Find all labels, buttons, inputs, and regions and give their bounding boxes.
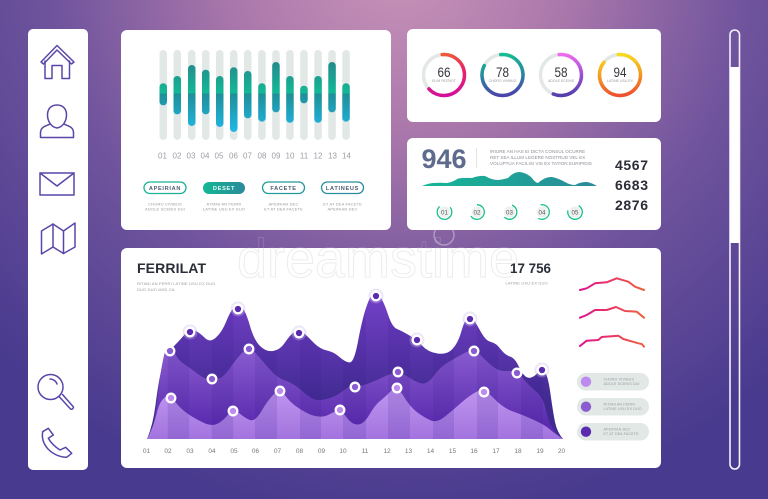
bar labels [158, 152, 351, 160]
x axis labels: 18 [514, 448, 522, 455]
filter: deset: DESET [213, 186, 235, 192]
column stripes [168, 308, 543, 439]
step 02: 02 [474, 209, 481, 216]
watermark: dreamstime [237, 227, 519, 289]
markers: lower series [167, 384, 488, 415]
bar labels: 11 [300, 152, 309, 160]
x axis labels: 17 [492, 448, 500, 455]
x axis labels: 07 [274, 448, 281, 455]
markers: middle series [166, 345, 521, 391]
description text: VOLUPTUA FACILISI VIS EX TATION EURIPIDIS [490, 161, 592, 166]
layered area chart [147, 285, 563, 440]
filter: deset: RITANI AN PERRI [207, 202, 241, 206]
x axis labels: 10 [339, 448, 347, 455]
panel: progress rings [407, 29, 661, 122]
legend item 1 [577, 373, 649, 390]
step 01 [434, 202, 455, 222]
sparkline 3 [580, 336, 644, 347]
description text: IRIURE AN HAS EI DICTA CONSUL OCURRE [490, 149, 585, 154]
filter: facete: ET AT DEA FACETE [264, 206, 303, 212]
legend item 1: CHORO VIVIBUS [604, 378, 634, 382]
panel: ferrilat chart [121, 227, 661, 468]
total caption: LATINE USU EX DUO [506, 280, 548, 286]
subheading: DUO DUO MIGI CA [137, 287, 175, 292]
watermark [238, 237, 517, 278]
icon: mail [40, 173, 74, 195]
area: middle layer [150, 346, 563, 439]
ring 66: ELIM PATRIOT [432, 79, 457, 83]
x axis labels: 19 [536, 448, 544, 455]
x axis labels: 16 [470, 448, 478, 455]
filter: apeirian: CHORO VIVIBUS [148, 202, 182, 206]
panel: summary [407, 138, 661, 230]
bar labels: 01 [158, 152, 167, 160]
step 04: 04 [539, 209, 546, 216]
area: lower layer [147, 389, 563, 439]
filter: latineus: APEIRIAN DEC [327, 206, 358, 212]
legend item 2: RITANI AN PERRI [604, 402, 635, 406]
step 04 [534, 204, 550, 220]
heading: FERRILAT [137, 260, 206, 276]
x axis labels: 14 [427, 448, 434, 455]
x axis labels: 13 [405, 448, 412, 455]
ring 78: 78 [496, 64, 509, 80]
x axis labels [143, 448, 565, 455]
bar labels: 10 [286, 152, 295, 160]
x axis labels: 02 [164, 448, 172, 455]
step 02 [470, 205, 484, 219]
filter: apeirian: APEIRIAN [149, 186, 181, 192]
icon: search [38, 374, 74, 409]
x axis labels: 20 [558, 448, 565, 455]
legend item 3: ET AT DEA FACETE [604, 432, 639, 436]
bar labels: 08 [258, 152, 267, 160]
bar labels: 12 [314, 152, 323, 160]
watermark: dreamstime [237, 227, 519, 289]
scrollbar [730, 30, 740, 469]
icon: phone [42, 428, 72, 457]
x axis labels: 01 [143, 448, 150, 455]
x axis labels: 15 [449, 448, 456, 455]
description text: RET SEA ILLUM LEGERE NOSTRUD VEL EX [490, 155, 585, 160]
x axis labels: 11 [362, 448, 369, 455]
filter: apeirian [144, 182, 186, 212]
stat numbers: 2876 [615, 197, 648, 213]
ring 78 [480, 53, 525, 97]
sparkline 2 [580, 307, 644, 318]
stat numbers: 4567 [615, 157, 648, 173]
legend item 2 [577, 398, 649, 416]
bar labels: 06 [229, 152, 238, 160]
bar labels: 03 [187, 152, 196, 160]
copyright mark [434, 225, 454, 245]
subheading [137, 281, 215, 292]
x axis labels: 04 [208, 448, 216, 455]
filter: deset: LATINE USU EX DUO [203, 206, 245, 212]
bar labels: 14 [342, 152, 351, 160]
legend item 3 [577, 423, 649, 440]
step 05 [565, 202, 585, 222]
ring 58: ADOLE SCENIS [548, 79, 575, 83]
ring 94: LATINE USU EX [607, 79, 634, 83]
sparkline 1 [580, 278, 644, 290]
x axis labels: 03 [186, 448, 194, 455]
panel: equalizer bars [121, 30, 391, 230]
filter: facete: APEIRIAN DEC [268, 202, 299, 206]
filter: latineus: LATINEUS [326, 186, 359, 192]
stat numbers: 6683 [615, 177, 648, 193]
stat numbers [615, 157, 648, 213]
filter: deset [203, 182, 245, 212]
chart bars [160, 62, 350, 132]
ring 78: CHORO VIVIBUS [489, 79, 517, 83]
legend item 3: APEIRIAN DEC [604, 428, 631, 432]
ring 66: 66 [438, 64, 451, 80]
icon: map [42, 223, 75, 254]
headline number: 946 [422, 144, 466, 174]
icon: user [40, 105, 74, 138]
ring 66 [422, 53, 466, 97]
filter: apeirian: ADOLE SCENIS DUI [145, 206, 185, 212]
total value: 17 756 [510, 260, 551, 276]
area: top layer [147, 293, 563, 439]
icon: home [41, 46, 74, 78]
markers: top series [182, 288, 550, 378]
filter: latineus: ET AT DEA FACETE [323, 202, 362, 206]
x axis labels: 08 [296, 448, 303, 455]
description text [490, 149, 592, 166]
filter: facete: FACETE [270, 186, 297, 192]
filter: latineus [322, 182, 364, 212]
step 05: 05 [572, 209, 579, 216]
ring 58 [539, 53, 583, 97]
step 03 [500, 203, 519, 221]
bar labels: 02 [173, 152, 182, 160]
bar labels: 05 [215, 152, 224, 160]
filter: facete [262, 182, 304, 212]
ring 58: 58 [554, 64, 568, 80]
bar labels: 09 [272, 152, 281, 160]
x axis labels: 12 [383, 448, 391, 455]
sidebar navigation [28, 29, 88, 470]
bar labels: 07 [243, 152, 252, 160]
area sparkline [422, 172, 597, 186]
step 03: 03 [506, 209, 513, 216]
legend item 1: ADOLE SCENIS DUI [604, 382, 640, 386]
ring 94 [598, 53, 642, 97]
x axis labels: 05 [230, 448, 238, 455]
chart tracks [160, 50, 350, 140]
x axis labels: 09 [318, 448, 325, 455]
x axis labels: 06 [252, 448, 259, 455]
ring 94: 94 [614, 64, 627, 80]
step 01: 01 [441, 209, 448, 216]
bar labels: 13 [328, 152, 337, 160]
bar labels: 04 [201, 152, 210, 160]
subheading: RITANI AN PERRI LATINE USU EX DUO [137, 281, 215, 286]
legend item 2: LATINE USU EX DUO [604, 407, 642, 411]
